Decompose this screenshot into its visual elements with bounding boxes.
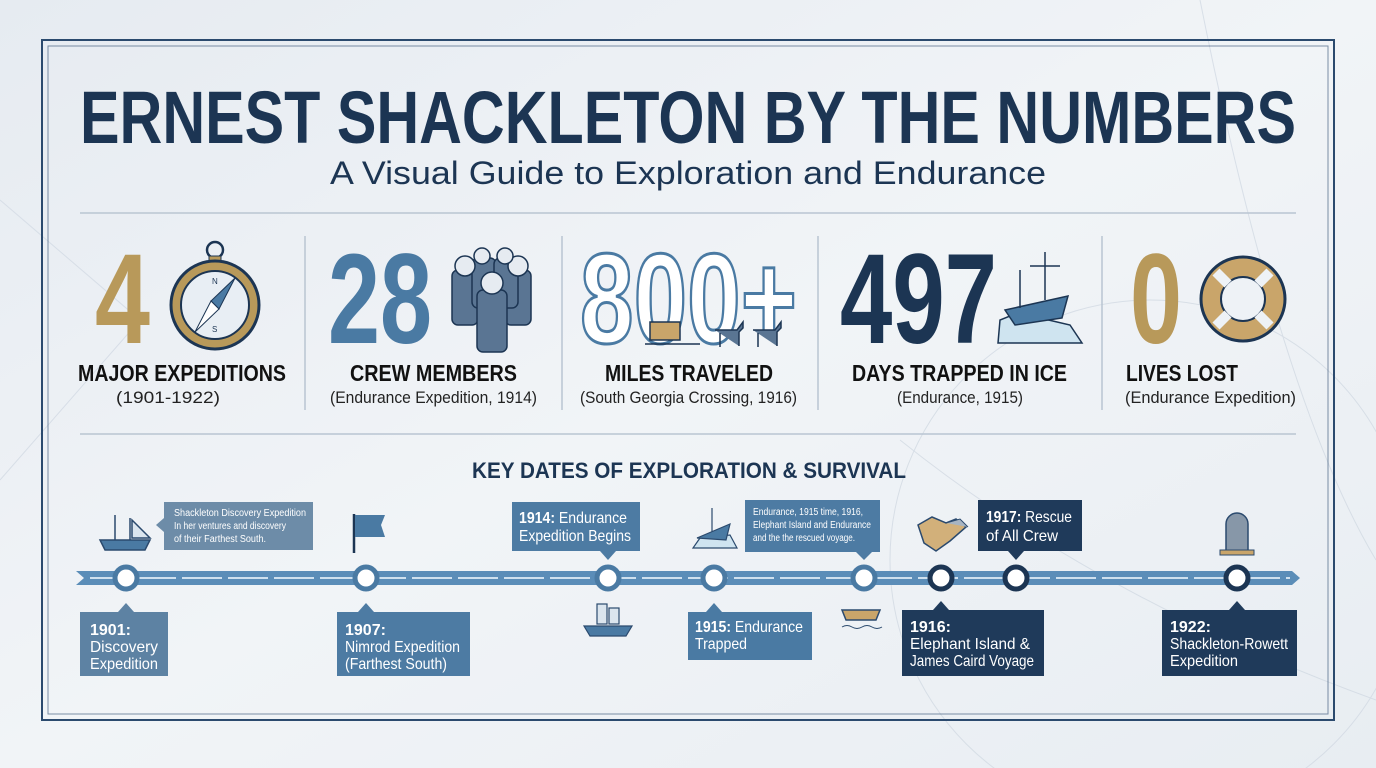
box: 1907: 1907:: [345, 622, 386, 639]
icon: crew: [452, 248, 531, 352]
icon: ship in ice 1915: [693, 508, 737, 548]
callout: discovery note: In her ventures and discovery: [174, 521, 286, 532]
icon: life ring: [1201, 257, 1285, 341]
box: 1901: 1901:: [90, 622, 131, 639]
icon: sled and dogs: [645, 322, 781, 347]
subtitle: A Visual Guide to Exploration and Endurance: [330, 155, 1046, 191]
callout: 1915 note: and the the rescued voyage.: [753, 533, 855, 544]
box: 1916: 1916:: [910, 619, 951, 636]
callout: 1917: [978, 500, 1082, 560]
box: 1915: [688, 603, 812, 660]
stat: miles: [580, 228, 797, 407]
callout: 1915 note: Endurance, 1915 time, 1916,: [753, 507, 863, 518]
box: 1901: [80, 603, 168, 676]
stat: miles: 800+: [580, 228, 797, 371]
icon: compass: N: [212, 277, 218, 286]
stat: crew: CREW MEMBERS: [350, 360, 517, 386]
icon: ship 1914: [584, 604, 632, 636]
box: 1922: 1922:: [1170, 619, 1211, 636]
timeline bar: [76, 567, 1300, 589]
callout: 1915 note: Elephant Island and Endurance: [753, 520, 871, 531]
callout: discovery note: Shackleton Discovery Expedition: [174, 508, 306, 519]
icon: compass: S: [212, 325, 217, 334]
box: 1916: [902, 601, 1044, 676]
callout: 1914: Expedition Begins: [519, 528, 631, 545]
box: 1916: James Caird Voyage: [910, 653, 1034, 670]
callout: discovery note: [156, 502, 313, 550]
callout: 1914: 1914: Endurance: [519, 510, 627, 527]
box: 1915: 1915: Endurance: [695, 619, 803, 636]
icon: gravestone: [1220, 513, 1254, 555]
icon: flag: [354, 514, 385, 553]
box: 1901: Expedition: [90, 656, 158, 673]
callout: 1917: 1917: Rescue: [986, 509, 1072, 526]
icon: handshake: [918, 517, 968, 551]
stat: days: (Endurance, 1915): [897, 388, 1023, 407]
callout: 1914: [512, 502, 640, 560]
stat: expeditions: MAJOR EXPEDITIONS: [78, 360, 286, 386]
stat: crew: (Endurance Expedition, 1914): [330, 388, 537, 407]
callout: 1915 note: [745, 500, 880, 560]
callout: 1917: of All Crew: [986, 528, 1058, 545]
icon: ship in ice: [998, 252, 1082, 343]
stat: lives: (Endurance Expedition): [1125, 388, 1296, 407]
stat: expeditions: (1901-1922): [116, 388, 220, 407]
callout: discovery note: of their Farthest South.: [174, 534, 266, 545]
box: 1916: Elephant Island &: [910, 636, 1030, 653]
icon: ship 1901: [100, 515, 150, 550]
stat: crew: [328, 228, 537, 407]
box: 1907: Nimrod Expedition: [345, 639, 460, 656]
stat: days: DAYS TRAPPED IN ICE: [852, 360, 1067, 386]
stat: miles: MILES TRAVELED: [605, 360, 773, 386]
stat: expeditions: [78, 228, 286, 407]
stat: crew: 28: [328, 228, 432, 371]
box: 1922: Expedition: [1170, 653, 1238, 670]
stat: lives: 0: [1130, 228, 1182, 371]
box: 1907: [337, 603, 470, 676]
box: 1922: [1162, 601, 1297, 676]
box: 1922: Shackleton-Rowett: [1170, 636, 1288, 653]
stat: lives: LIVES LOST: [1126, 360, 1238, 386]
icon: compass: [171, 242, 259, 349]
stat: days: 497: [840, 228, 997, 371]
stat: miles: (South Georgia Crossing, 1916): [580, 388, 797, 407]
box: 1915: Trapped: [695, 636, 747, 653]
box: 1901: Discovery: [90, 639, 158, 656]
box: 1907: (Farthest South): [345, 656, 447, 673]
stat: expeditions: 4: [95, 228, 150, 371]
icon: lifeboat: [842, 610, 882, 628]
stat: lives: [1125, 228, 1296, 407]
timeline heading: KEY DATES OF EXPLORATION & SURVIVAL: [472, 458, 906, 483]
